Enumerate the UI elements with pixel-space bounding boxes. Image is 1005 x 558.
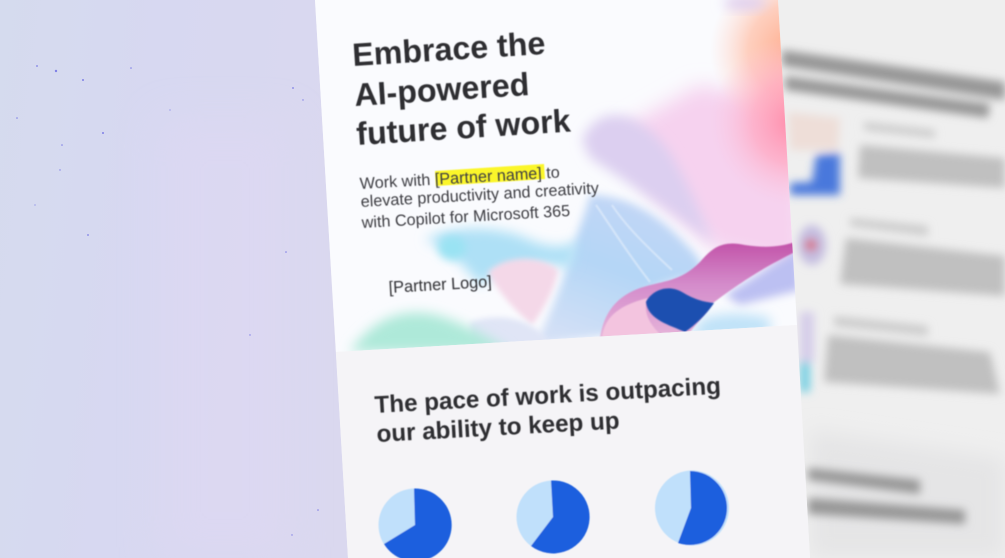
partner logo placeholder: [Partner Logo] [388, 273, 492, 297]
panel: blurred background page [770, 0, 1005, 558]
section heading: our ability to keep up [376, 407, 620, 448]
title: future of work [355, 103, 572, 152]
pie chart 1 [378, 488, 452, 558]
section heading [374, 373, 722, 448]
pie chart 3 [655, 470, 729, 546]
blurred text blocks [824, 122, 1005, 394]
pie charts [378, 470, 729, 558]
fluid art: cyan fold [425, 229, 578, 285]
fluid art: blue silk [535, 195, 702, 345]
fluid art: pink base [602, 298, 662, 338]
subtitle text: with Copilot for Microsoft 365 [360, 202, 571, 232]
fluid art: pale silk [470, 316, 540, 343]
subtitle text: Work with [Partner name] to [359, 163, 560, 193]
speckle dots [16, 65, 319, 536]
fluid art: magenta ribbon [600, 242, 795, 338]
blurred heading [782, 50, 1005, 118]
fluid art: dark blue pool [646, 288, 714, 332]
fluid art: teal wave [350, 313, 510, 352]
title [351, 25, 572, 152]
section heading: The pace of work is outpacing [374, 373, 722, 419]
panel: hero artwork [310, 0, 805, 360]
panel: main page card [310, 0, 810, 558]
fluid art: peach and pink glow [633, 0, 793, 264]
blurred footer heading [808, 468, 965, 524]
subtitle text: elevate productivity and creativity [360, 179, 600, 211]
fluid art: right lilac shadow [725, 248, 800, 305]
title: AI-powered [353, 66, 530, 113]
subtitle text [359, 163, 600, 232]
highlight: partner name [435, 164, 545, 186]
title: Embrace the [351, 25, 546, 73]
pie chart 2 [516, 480, 590, 554]
panel: lower section [336, 325, 810, 558]
blurred art thumbnails [788, 112, 840, 392]
panel: lavender textured background [0, 0, 360, 558]
fluid art: pink blob [488, 259, 558, 325]
fluid art: lavender fold [582, 115, 715, 245]
